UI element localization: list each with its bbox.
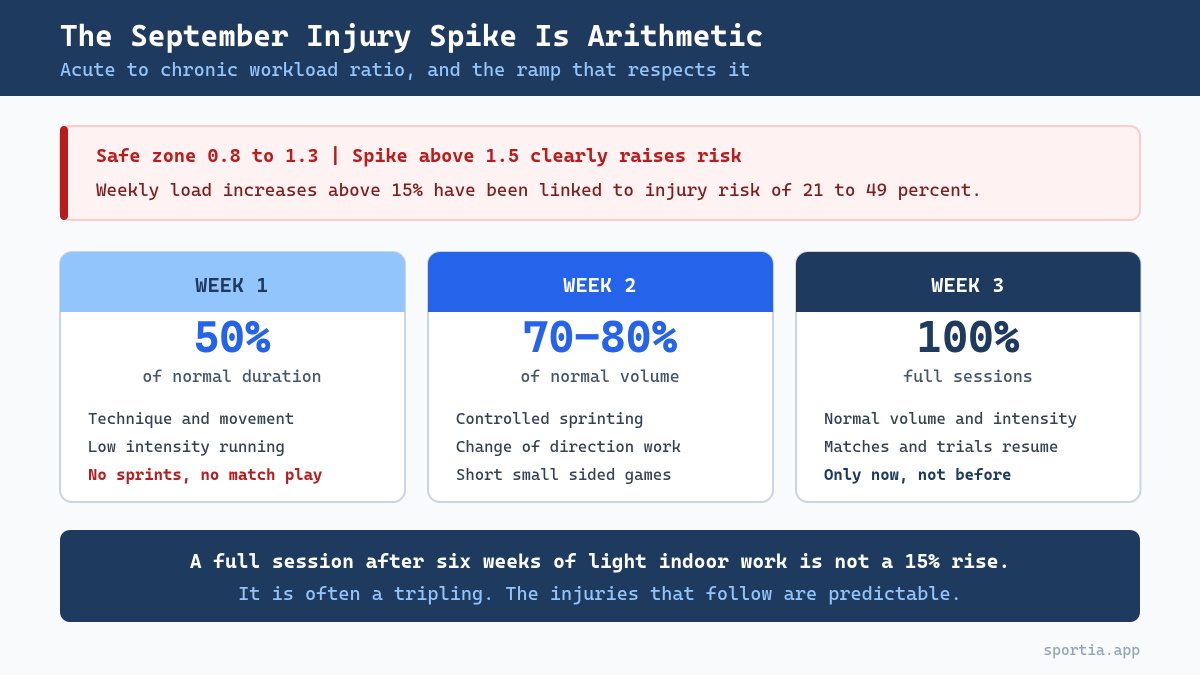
week 3 item: Normal volume and intensity xyxy=(824,409,1077,428)
week 2 percentage: 70–80% xyxy=(523,312,678,363)
week 1 item: Low intensity running xyxy=(88,437,285,456)
panel: week 1 xyxy=(60,252,405,502)
alert text: Weekly load increases above 15% have been linked to injury risk of 21 to 49 percent. xyxy=(96,180,982,201)
week 1 item: Technique and movement xyxy=(88,409,294,428)
subtitle: Acute to chronic workload ratio, and the ramp that respects it xyxy=(60,59,750,81)
panel: week 2 xyxy=(428,252,773,502)
title: The September Injury Spike Is Arithmetic xyxy=(60,19,763,54)
banner second line: It is often a tripling. The injuries that follow are predictable. xyxy=(238,583,962,605)
week 2 item: Short small sided games xyxy=(456,465,672,484)
alert panel xyxy=(60,126,1140,220)
week 3 percentage: 100% xyxy=(916,312,1020,363)
week 3 emphasis: Only now, not before xyxy=(824,465,1012,484)
header band xyxy=(0,0,1200,96)
footer credit: sportia.app xyxy=(1043,641,1140,659)
alert heading: Safe zone 0.8 to 1.3 | Spike above 1.5 clearly raises risk xyxy=(96,145,742,167)
week 3 header xyxy=(796,252,1140,312)
alert accent bar xyxy=(60,126,68,220)
conclusion banner xyxy=(60,530,1140,622)
week 2 label: WEEK 2 xyxy=(563,273,637,297)
week 1 header xyxy=(60,252,405,312)
week 2 caption: of normal volume xyxy=(520,366,680,386)
week 3 item: Matches and trials resume xyxy=(824,437,1058,456)
week 1 label: WEEK 1 xyxy=(195,273,269,297)
week 3 caption: full sessions xyxy=(903,366,1033,386)
week 1 warning: No sprints, no match play xyxy=(88,465,322,484)
panel: week 3 xyxy=(796,252,1140,502)
banner main line: A full session after six weeks of light indoor work is not a 15% rise. xyxy=(190,549,1010,573)
week 1 caption: of normal duration xyxy=(142,366,322,386)
week 1 percentage: 50% xyxy=(193,312,271,363)
week 2 item: Controlled sprinting xyxy=(456,409,644,428)
week 2 item: Change of direction work xyxy=(456,437,681,456)
week 3 label: WEEK 3 xyxy=(931,273,1005,297)
week 2 header xyxy=(428,252,773,312)
